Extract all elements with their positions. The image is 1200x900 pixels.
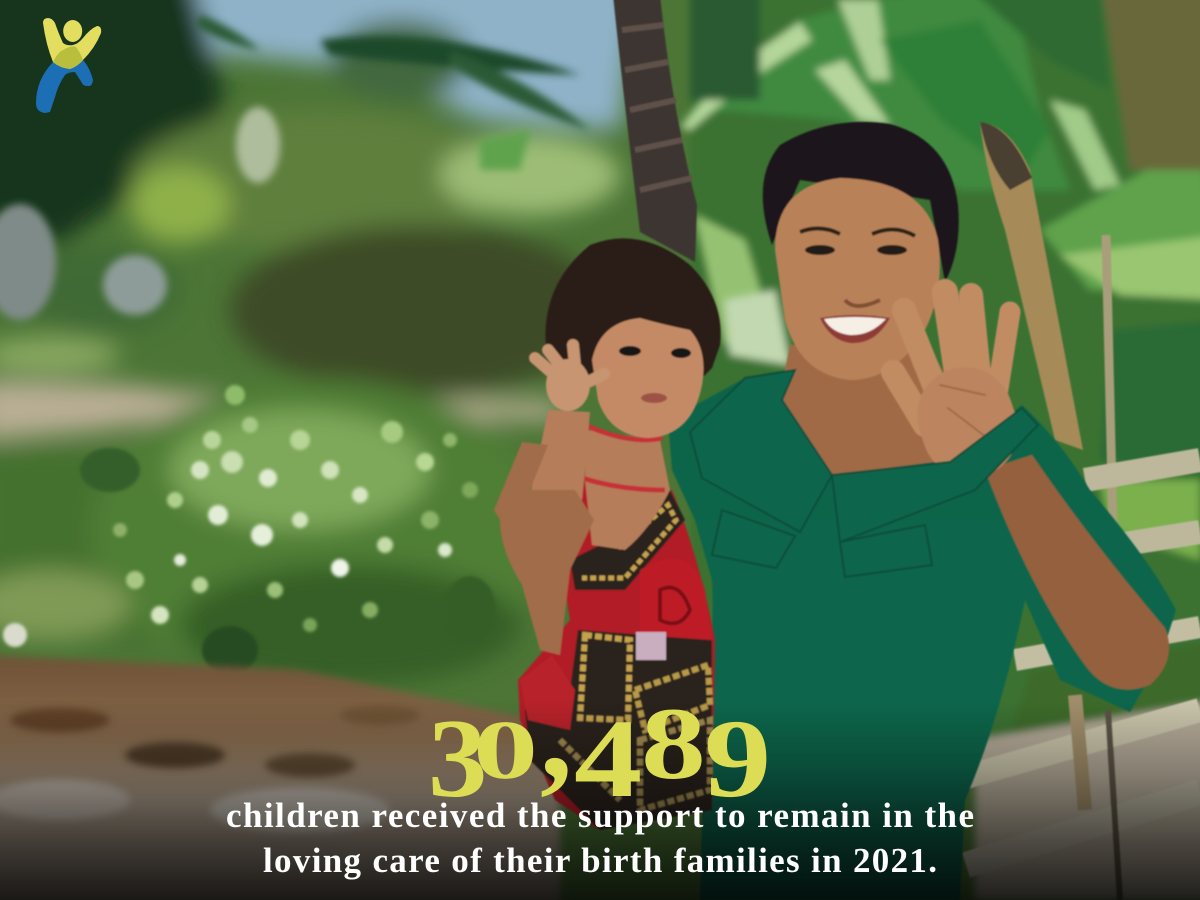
caption text: children received the support to remain in the xyxy=(226,796,974,835)
headline number: 30,489: 3 xyxy=(428,696,487,820)
child xyxy=(494,238,721,830)
child: skirt and dress xyxy=(518,482,715,830)
palm tree trunk xyxy=(613,0,697,262)
logo: olive overlap xyxy=(53,46,83,69)
logo: head xyxy=(63,20,82,42)
child: chest skin xyxy=(585,430,670,550)
wooden fence post xyxy=(980,122,1083,450)
woman: forearm xyxy=(985,455,1169,690)
headline number: 30,489: 4 xyxy=(574,697,642,821)
background bush speckles xyxy=(3,385,496,674)
woman: face xyxy=(775,178,940,380)
child: red necklace xyxy=(582,425,665,490)
background foliage on the right xyxy=(680,0,1200,900)
logo: running figure xyxy=(36,18,101,113)
caption text: loving care of their birth families in 2021. xyxy=(263,841,937,880)
mother's supporting arm and hand xyxy=(494,442,594,655)
bamboo fence xyxy=(966,235,1200,900)
child: face xyxy=(592,318,704,438)
headline number: 30,489: 0 xyxy=(473,703,538,796)
headline number: 30,489: 8 xyxy=(641,687,706,801)
woman: neck and chest xyxy=(780,345,1000,478)
caption text xyxy=(226,796,974,880)
woman xyxy=(668,122,1176,900)
child: hair back xyxy=(546,238,721,380)
child: raised arm xyxy=(530,410,590,500)
dark gradient overlay behind the text xyxy=(0,700,1200,900)
logo: blue legs xyxy=(36,60,93,113)
child: patterned black and gold cloth xyxy=(520,490,712,830)
logo: yellow arms and body xyxy=(43,18,101,69)
woman: hair xyxy=(763,122,959,282)
woman: waving hand xyxy=(893,292,1010,440)
headline number: 30,489: 9 xyxy=(704,696,771,820)
woman: eyes and smile xyxy=(800,228,915,343)
child: eyes and mouth xyxy=(619,346,691,403)
woman: collar xyxy=(690,370,1038,577)
woman: dress xyxy=(668,370,1176,900)
child: raised hand xyxy=(535,345,604,405)
headline number: 30,489 xyxy=(428,662,771,821)
headline number: 30,489: , xyxy=(540,662,572,806)
